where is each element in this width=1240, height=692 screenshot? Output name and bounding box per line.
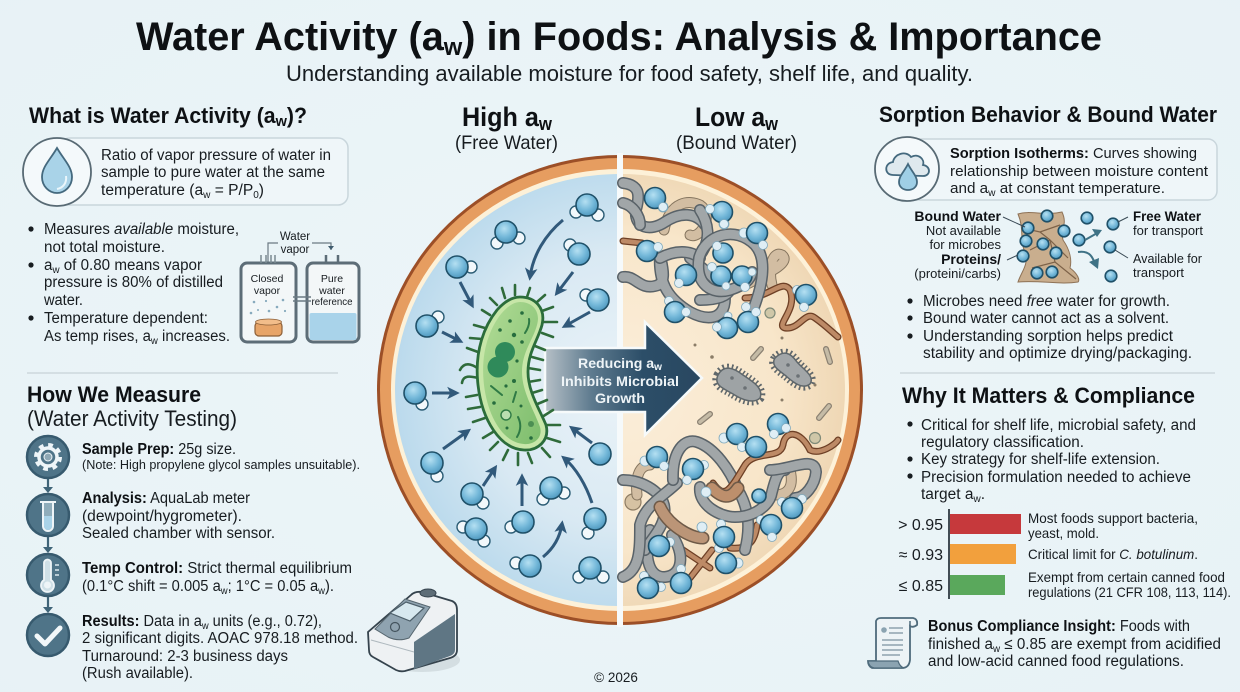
bullet list: what is water activity: Temperature dependent:: [44, 310, 208, 327]
heading: how we measure: How We Measure: [27, 382, 201, 407]
labels: bound water: (proteini/carbs): [914, 266, 1001, 281]
labels: bound water: Bound Water: [914, 208, 1002, 224]
step: sample prep: (Note: High propylene glycol samples unsuitable).: [82, 457, 360, 472]
step: results: Turnaround: 2-3 business days: [82, 648, 288, 665]
inactive microbes: [694, 336, 830, 422]
bullet list: what is water activity: a: [44, 257, 53, 274]
bullet list: what is water activity: w: [51, 265, 60, 276]
heading: low water activity: [676, 102, 797, 154]
panel: sorption behavior: [875, 102, 1217, 362]
labels: free water: for transport: [1133, 223, 1203, 238]
heading: what is water activity: )?: [287, 103, 307, 128]
step: results: units (e.g., 0.72),: [209, 613, 322, 630]
cell body: [477, 297, 547, 450]
cilia and flagella: [460, 285, 560, 465]
heading: high water activity: [455, 102, 558, 154]
labels: bound water: Proteins/: [941, 251, 1001, 267]
icon: thermometer: [27, 554, 69, 596]
step: results: w: [201, 621, 209, 632]
bullet list: what is water activity: water.: [43, 292, 83, 309]
step: temp control: ).: [325, 578, 334, 595]
labels: free water: Free Water: [1133, 208, 1202, 224]
diagram: closed vapor and pure water vessels: Water: [280, 231, 310, 243]
step: temp control: [82, 560, 352, 597]
heading: high water activity: (Free Water): [455, 132, 558, 154]
heading: high water activity: w: [538, 114, 553, 134]
diagram: closed vapor and pure water vessels: vapor: [254, 285, 281, 297]
heading: high water activity: High a: [462, 102, 545, 132]
central arrow: reducing water activity: Reducing a: [578, 355, 653, 371]
labels: bound water: for microbes: [929, 237, 1001, 252]
heading: low water activity: (Bound Water): [676, 132, 797, 154]
high water side: free water molecules: [404, 194, 611, 583]
food matrix: [1018, 212, 1079, 283]
bullet list: sorption: Understanding sorption helps predict: [923, 328, 1174, 345]
panel: how we measure: [27, 382, 360, 682]
bullet list: why it matters: Key strategy for shelf-life extension.: [921, 451, 1160, 468]
bullet list: what is water activity: pressure is 80% of distilled: [44, 274, 223, 291]
heading: how we measure: [27, 382, 237, 431]
bullet list: why it matters: .: [981, 486, 985, 503]
bullet list: sorption: Microbes need free water for growth.: [923, 293, 1170, 310]
definition box: sorption isotherms: and a: [950, 180, 988, 197]
step: analysis: Analysis: AquaLab meter: [82, 490, 250, 507]
bullet list: what is water activity: [28, 221, 239, 347]
definition box: w: [202, 190, 211, 201]
definition box: sorption isotherms: w: [987, 188, 996, 199]
step: temp control: ; 1°C = 0.05 a: [228, 578, 319, 595]
step: analysis: Sealed chamber with sensor.: [82, 525, 275, 542]
bullet list: what is water activity: Measures available moisture,: [44, 221, 239, 238]
leader lines and transport arrows: [1003, 217, 1128, 269]
nucleus: [488, 342, 515, 378]
icon: water activity meter: [368, 589, 460, 672]
organelles: [491, 311, 534, 440]
bar: above 0.95: [898, 510, 1198, 541]
heading: sorption behavior: Sorption Behavior & Bound Water: [879, 102, 1217, 127]
icon: regulation scroll: [868, 618, 917, 668]
labels: free water: [1133, 208, 1203, 280]
bar: about 0.93: [899, 544, 1198, 564]
bullet list: what is water activity: increases.: [158, 328, 230, 345]
labels: bound water: [914, 208, 1002, 281]
callout: bonus compliance insight: Bonus Compliance Insight: Foods with: [928, 618, 1190, 635]
bacterium: [460, 285, 560, 465]
step: analysis: (dewpoint/hygrometer).: [82, 508, 242, 525]
bullet list: why it matters: regulatory classification.: [921, 434, 1084, 451]
definition box: sorption isotherms: at constant temperature.: [996, 180, 1165, 197]
definition box: ): [259, 182, 264, 199]
definition box: = P/P: [210, 182, 253, 199]
callout: bonus compliance insight: [928, 618, 1221, 670]
icon: check mark: [27, 614, 69, 656]
panel: what is water activity: [23, 103, 359, 347]
low water side: lower tangled polymer with bound water: [623, 414, 838, 598]
bullet list: sorption: Bound water cannot act as a solvent.: [923, 310, 1169, 327]
bar: about 0.93: ≈ 0.93: [899, 547, 943, 564]
heading: what is water activity: w: [275, 113, 287, 130]
bullet list: what is water activity: w: [150, 336, 159, 347]
bullet list: sorption: stability and optimize drying/packaging.: [923, 345, 1192, 362]
icon: test tube: [27, 494, 69, 536]
step: analysis: [82, 490, 275, 542]
icon: water drop: [23, 138, 91, 206]
heading: low water activity: Low a: [695, 102, 772, 132]
step: results: 2 significant digits. AOAC 978.18 method.: [82, 630, 358, 647]
definition box: sorption isotherms: Sorption Isotherms: Curves showing: [950, 145, 1197, 162]
diagram: closed vapor and pure water vessels: reference: [312, 296, 353, 308]
bar: about 0.93: Critical limit for C. botulinum.: [1028, 546, 1198, 562]
step: sample prep: Sample Prep: 25g size.: [82, 441, 236, 458]
central arrow: reducing water activity: Inhibits Microbial: [561, 373, 679, 389]
step: results: [82, 613, 358, 682]
bullet list: why it matters: Precision formulation needed to achieve: [921, 469, 1191, 486]
heading: low water activity: w: [764, 114, 779, 134]
definition box: sample to pure water at the same: [101, 164, 325, 181]
bar: above 0.95: yeast, mold.: [1028, 525, 1099, 541]
labels: free water: Available for: [1133, 251, 1203, 266]
title: Water Activity (a: [136, 15, 446, 59]
bullet list: why it matters: Critical for shelf life, microbial safety, and: [921, 417, 1196, 434]
bullet list: why it matters: w: [972, 494, 981, 505]
arrows: water moving toward the bacterium: [432, 220, 592, 557]
heading: what is water activity: What is Water Activity (a: [29, 103, 284, 128]
icon: cloud and water drop: [875, 137, 939, 201]
step: temp control: w: [317, 586, 326, 597]
definition box: sorption isotherms: relationship between moisture content: [950, 163, 1209, 180]
title: w: [443, 34, 463, 61]
subtitle: Understanding available moisture for food safety, shelf life, and quality.: [286, 61, 973, 86]
bullet list: what is water activity: not total moisture.: [44, 239, 165, 256]
step: temp control: w: [220, 586, 228, 597]
diagram: closed vapor and pure water vessels: water: [318, 285, 345, 297]
step: results: (Rush available).: [82, 665, 193, 682]
title: ) in Foods: Analysis & Importance: [462, 15, 1102, 59]
low water side: upper tangled polymer with bound water: [623, 183, 838, 338]
labels: free water: transport: [1133, 265, 1184, 280]
diagram: closed vapor and pure water vessels: Pure: [321, 273, 343, 285]
diagram: closed vapor and pure water vessels: vapor: [281, 244, 310, 256]
step: sample prep: [82, 441, 360, 472]
definition box: Ratio of vapor pressure of water in: [101, 147, 331, 164]
panel: why it matters and compliance: [868, 383, 1231, 670]
comparison circle: [377, 102, 863, 627]
bar: at most 0.85: Exempt from certain canned food: [1028, 569, 1225, 585]
definition box: temperature (a: [101, 182, 203, 199]
bullet list: what is water activity: As temp rises, a: [44, 328, 155, 345]
central arrow: reducing water activity: w: [653, 362, 662, 373]
bar: above 0.95: > 0.95: [898, 517, 943, 534]
bullet list: sorption: [907, 293, 1192, 362]
heading: why it matters: Why It Matters & Compliance: [902, 383, 1195, 408]
step connectors: [43, 478, 53, 613]
step: temp control: Temp Control: Strict thermal equilibrium: [82, 560, 352, 577]
bar: above 0.95: Most foods support bacteria,: [1028, 510, 1198, 526]
bullet list: why it matters: target a: [921, 486, 974, 503]
callout: bonus compliance insight: and low-acid canned food regulations.: [928, 653, 1184, 670]
central arrow: reducing water activity: [545, 322, 702, 435]
copyright: © 2026: [594, 670, 638, 685]
callout: bonus compliance insight: w: [992, 644, 1001, 655]
callout: bonus compliance insight: finished a: [928, 636, 994, 653]
callout: bonus compliance insight: ≤ 0.85 are exempt from acidified: [1000, 636, 1221, 653]
circle ring and halves: [377, 153, 863, 627]
definition box: [60, 138, 348, 205]
step: results: Results: Data in a: [82, 613, 206, 630]
bullet list: why it matters: [907, 417, 1196, 505]
definition box: 0: [253, 190, 259, 201]
bar: at most 0.85: [899, 569, 1231, 600]
icon: gear: [27, 436, 69, 478]
diagram: closed vapor and pure water vessels: [241, 231, 359, 342]
labels: bound water: Not available: [926, 223, 1001, 238]
diagram: bound and free water: [914, 208, 1203, 283]
diagram: closed vapor and pure water vessels: Closed: [251, 273, 284, 285]
bar chart: water activity thresholds: [898, 509, 1231, 600]
step: temp control: (0.1°C shift = 0.005 a: [82, 578, 228, 595]
bar: at most 0.85: ≤ 0.85: [899, 578, 943, 595]
bullet list: what is water activity: of 0.80 means vapor: [60, 257, 202, 274]
central arrow: reducing water activity: Growth: [595, 390, 645, 406]
definition box: sorption isotherms: [910, 139, 1217, 200]
free and bound water molecules: [1017, 210, 1119, 282]
heading: how we measure: (Water Activity Testing): [27, 406, 237, 431]
